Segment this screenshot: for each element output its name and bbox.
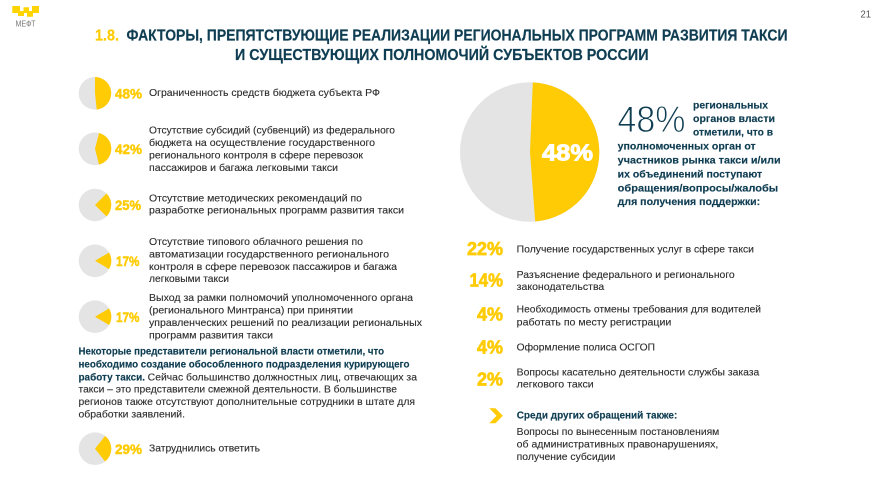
- request row: 14%: [470, 269, 735, 293]
- factor row: 25% methodical recommendations: 25%: [115, 197, 142, 213]
- callout: 48% of regional authorities: [618, 99, 781, 208]
- factor row: 17% beyond authority: управленческих решений по реализации региональных: [149, 318, 422, 329]
- request row: 4% registration: работать по месту регистрации: [517, 316, 671, 328]
- factor row: 17% cloud solution: 17%: [116, 253, 140, 269]
- text block: note from regional authorities: работу такси.: [78, 371, 145, 383]
- factor row: 17% beyond authority: программ развития такси: [149, 330, 273, 341]
- text block: note from regional authorities: такси – это представители смежной деятельности. В большинстве: [78, 383, 397, 395]
- callout: 48% of regional authorities: уполномоченных орган от: [618, 141, 756, 152]
- factor row: 29% hard to answer: [79, 432, 260, 465]
- title: И СУЩЕСТВУЮЩИХ ПОЛНОМОЧИЙ СУБЪЕКТОВ РОССИИ: [235, 45, 648, 64]
- factor row: 25% methodical recommendations: Отсутствие методических рекомендаций по: [149, 193, 362, 204]
- callout: 48% of regional authorities: обращения/вопросы/жалобы: [618, 182, 778, 194]
- large pie chart 48%: [460, 82, 599, 222]
- factor row: 42% subsidies: [79, 124, 395, 174]
- icon: chevron arrow: [489, 408, 503, 423]
- factor row: 29% hard to answer: 29%: [115, 441, 143, 457]
- text block: note from regional authorities: [78, 346, 417, 420]
- request row: 4% insurance: [477, 336, 655, 357]
- callout: 48% of regional authorities: участников рынка такси и/или: [618, 155, 781, 166]
- title: 1.8.: [95, 28, 119, 44]
- text block: note from regional authorities: регионов также отсутствуют дополнительные сотрудники в штате для: [78, 397, 415, 408]
- callout: 48% of regional authorities: их объединений поступают: [618, 168, 762, 180]
- request row: 14%: 14%: [470, 270, 503, 291]
- factor row: 29% hard to answer: Затруднились ответить: [149, 444, 260, 454]
- other requests text: [517, 409, 719, 463]
- request row: 4% registration: Необходимость отмены требования для водителей: [517, 304, 761, 316]
- factor row: 17% beyond authority: 17%: [116, 309, 140, 325]
- factor row: 42% subsidies: регионального контроля в сфере перевозок: [149, 149, 364, 161]
- factor row: 48% budget limits: 48%: [115, 86, 143, 102]
- factor row: 17% beyond authority: Выход за рамки полномочий уполномоченного органа: [149, 293, 413, 304]
- request row: 4% registration: [477, 304, 761, 328]
- request row: 14%: Разъяснение федерального и регионального: [517, 269, 735, 281]
- factor row: 42% subsidies: пассажиров и багажа легковыми такси: [149, 162, 338, 174]
- request row: 14%: законодательства: [517, 282, 605, 293]
- factor row: 17% cloud solution: [79, 236, 397, 285]
- pie 17%: [79, 244, 111, 277]
- factor row: 17% cloud solution: Отсутствие типового облачного решения по: [149, 236, 363, 248]
- other requests text: Среди других обращений также:: [517, 409, 677, 421]
- callout: 48% of regional authorities: органов власти: [693, 114, 775, 125]
- pie 48%: [79, 77, 111, 110]
- factor row: 17% beyond authority: (регионального Минтранса) при принятии: [149, 305, 353, 316]
- logo: МЕФТ: [12, 6, 39, 29]
- other requests text: Вопросы по вынесенным постановлениям: [517, 427, 719, 438]
- pie 29%: [79, 432, 111, 465]
- factor row: 17% cloud solution: контроля в сфере перевозок пассажиров и багажа: [149, 261, 397, 273]
- callout: 48% of regional authorities: 48%: [618, 99, 686, 140]
- factor row: 17% cloud solution: легковыми такси: [149, 274, 229, 285]
- other requests text: получение субсидии: [517, 451, 615, 463]
- factor row: 42% subsidies: 42%: [115, 141, 143, 157]
- text block: note from regional authorities: обработки заявлений.: [78, 408, 185, 420]
- callout: 48% of regional authorities: отметили, что в: [693, 128, 773, 139]
- request row: 2%: 2%: [477, 369, 503, 390]
- pie 42%: [79, 132, 111, 165]
- pie 25%: [79, 189, 111, 221]
- pie 17% second: [79, 300, 111, 333]
- factor row: 25% methodical recommendations: [79, 189, 404, 221]
- request row: 2%: Вопросы касательно деятельности службы заказа: [517, 367, 760, 379]
- factor row: 42% subsidies: бюджета на осуществление государственного: [149, 137, 375, 149]
- request row: 22%: Получение государственных услуг в сфере такси: [517, 243, 754, 255]
- request row: 22%: 22%: [467, 238, 503, 259]
- factor row: 17% cloud solution: автоматизации государственного регионального: [149, 249, 389, 260]
- factor row: 48% budget limits: Ограниченность средств бюджета субъекта РФ: [149, 87, 380, 99]
- request row: 4% insurance: Оформление полиса ОСГОП: [517, 341, 655, 353]
- callout: 48% of regional authorities: для получения поддержки:: [618, 197, 760, 208]
- large pie chart 48%: 48%: [542, 140, 593, 166]
- factor row: 48% budget limits: [79, 77, 380, 110]
- text block: note from regional authorities: необходимо создание обособленного подразделения курирующего: [78, 358, 410, 370]
- title: ФАКТОРЫ, ПРЕПЯТСТВУЮЩИЕ РЕАЛИЗАЦИИ РЕГИОНАЛЬНЫХ ПРОГРАММ РАЗВИТИЯ ТАКСИ: [126, 28, 788, 44]
- request row: 2%: легкового такси: [517, 380, 594, 391]
- factor row: 17% beyond authority: [79, 293, 422, 341]
- text block: note from regional authorities: Некоторые представители региональной власти отметили, что: [78, 346, 384, 357]
- other requests text: об административных правонарушениях,: [517, 438, 718, 450]
- callout: 48% of regional authorities: региональных: [693, 100, 768, 112]
- text block: note from regional authorities: Сейчас большинство должностных лиц, отвечающих за: [148, 371, 417, 383]
- logo: МЕФТ: МЕФТ: [16, 20, 36, 29]
- request row: 22%: [467, 238, 754, 259]
- factor row: 42% subsidies: Отсутствие субсидий (субвенций) из федерального: [149, 124, 395, 136]
- request row: 2%: [477, 367, 760, 391]
- page number: 21: [860, 10, 871, 20]
- title: [95, 28, 788, 64]
- request row: 4% insurance: 4%: [477, 336, 503, 357]
- request row: 4% registration: 4%: [477, 304, 503, 325]
- factor row: 25% methodical recommendations: разработке региональных программ развития такси: [149, 204, 404, 216]
